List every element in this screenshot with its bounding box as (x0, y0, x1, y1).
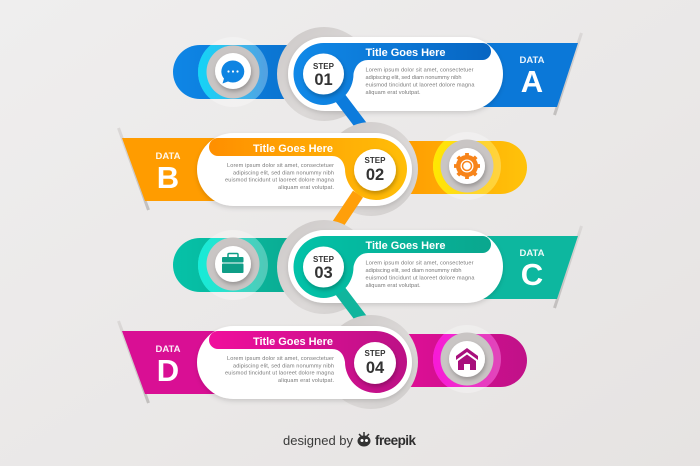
body text B: Lorem ipsum dolor sit amet, consectetuer (227, 163, 334, 169)
infographic canvas (118, 27, 583, 448)
step number C: 03 (314, 264, 333, 282)
step circle B (354, 149, 396, 191)
title A: Title Goes Here (366, 47, 446, 59)
title ribbon C (294, 236, 491, 298)
pill B (380, 141, 527, 194)
white card C (288, 230, 503, 303)
gray disc B (324, 122, 418, 216)
band A (470, 43, 578, 107)
step label B: STEP (365, 156, 386, 165)
step circle C (303, 246, 344, 288)
designed by text: designed by (283, 433, 354, 448)
row C: step 03 (173, 220, 582, 321)
freepik wordmark: freepik (375, 433, 416, 448)
body text D: adipiscing elit, sed diam nonummy nibh (233, 364, 334, 370)
title B: Title Goes Here (253, 143, 333, 155)
connector A to B (338, 95, 363, 128)
body text D: aliquam erat volutpat. (278, 378, 334, 384)
step circle A (303, 54, 344, 94)
band B fold (118, 128, 148, 210)
body text D: Lorem ipsum dolor sit amet, consectetuer (227, 356, 334, 362)
body text A: aliquam erat volutpat. (366, 90, 421, 96)
footer credit (283, 432, 416, 448)
body text A: adipiscing elit, sed diam nonummy nibh (366, 75, 462, 81)
step label A: STEP (313, 62, 335, 71)
pill A (173, 45, 313, 99)
step label C: STEP (313, 255, 335, 264)
step number D: 04 (366, 359, 385, 377)
white card B (197, 133, 412, 206)
title D: Title Goes Here (253, 336, 333, 348)
body text C: aliquam erat volutpat. (366, 283, 421, 289)
icon badge D: house (433, 332, 501, 387)
band A fold (554, 33, 582, 115)
body text D: euismod tincidunt ut laoreet dolore magna (225, 370, 335, 376)
band D fold (118, 321, 148, 403)
data letter C: C (521, 257, 543, 292)
title C: Title Goes Here (366, 240, 446, 252)
data letter D: D (157, 353, 179, 388)
body text B: aliquam erat volutpat. (278, 185, 334, 191)
icon: freepik logo (358, 432, 370, 446)
row A: step 01 (173, 27, 582, 128)
pill C (173, 238, 313, 292)
body text C: euismod tincidunt ut laoreet dolore magna (366, 276, 475, 282)
connector B to C (336, 194, 358, 227)
body text C: adipiscing elit, sed diam nonummy nibh (366, 268, 462, 274)
gray disc D (324, 315, 418, 409)
body text B: euismod tincidunt ut laoreet dolore magna (225, 178, 335, 184)
band B (122, 138, 235, 201)
data letter A: A (521, 64, 543, 99)
body text A: euismod tincidunt ut laoreet dolore magna (366, 82, 475, 88)
icon badge A: speech bubble (198, 45, 268, 99)
row B: step 02 (118, 122, 527, 227)
step number A: 01 (314, 71, 333, 89)
band D (122, 331, 235, 394)
body text B: adipiscing elit, sed diam nonummy nibh (233, 170, 334, 176)
connector C to D (338, 288, 363, 321)
icon badge B: gear (433, 140, 501, 194)
data label A: DATA (520, 55, 545, 66)
step label D: STEP (365, 349, 386, 358)
body text C: Lorem ipsum dolor sit amet, consectetuer (366, 260, 474, 266)
gray disc A (277, 27, 371, 121)
data label C: DATA (520, 248, 545, 259)
step number B: 02 (366, 166, 384, 184)
data label B: DATA (156, 151, 181, 162)
band C fold (554, 226, 582, 308)
body text A: Lorem ipsum dolor sit amet, consectetuer (366, 68, 474, 74)
white card D (197, 326, 412, 399)
title ribbon D (209, 331, 407, 393)
title ribbon B (209, 138, 407, 200)
data letter B: B (157, 160, 179, 195)
title ribbon A (294, 43, 491, 105)
pill D (380, 334, 527, 387)
data label D: DATA (156, 344, 181, 355)
row D: step 04 (118, 315, 527, 409)
gray disc C (277, 220, 371, 314)
step circle D (354, 342, 396, 384)
band C (470, 236, 578, 299)
icon badge C: briefcase (198, 238, 268, 292)
white card A (288, 37, 503, 111)
